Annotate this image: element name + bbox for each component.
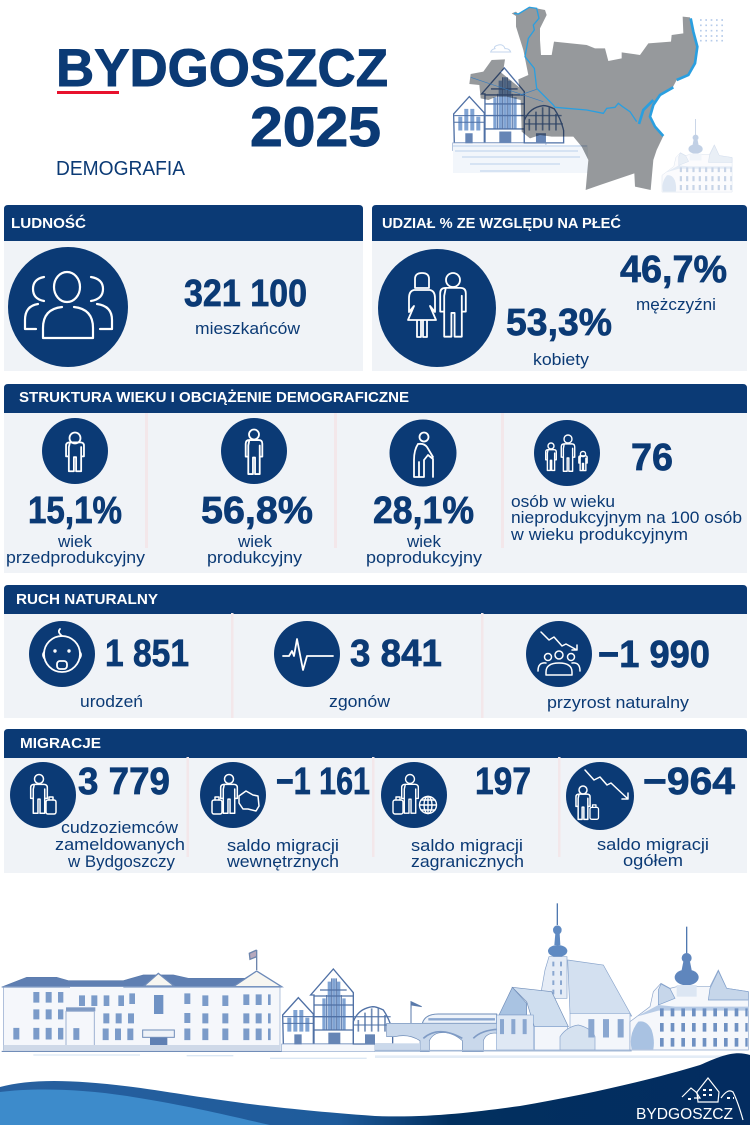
panel: age structure: 56,8% [201,490,313,532]
icon: baby [29,621,95,687]
panel: age structure: wiek [57,532,92,551]
icon: child [42,418,108,484]
panel: age structure: przedprodukcyjny [6,548,146,567]
panel: migration: wewnętrznych [226,852,339,871]
panel: migration: zagranicznych [411,852,524,871]
icon: migrant and globe [381,762,447,828]
title [56,39,388,180]
panel: age structure: wiek [237,532,272,551]
map of Bydgoszcz [469,7,723,190]
panel: migration: zameldowanych [55,835,185,854]
icon: migrant and falling arrow [566,762,634,830]
panel: age structure: produkcyjny [207,548,303,567]
panel: age structure: STRUKTURA WIEKU I OBCIĄŻENIE DEMOGRAFICZNE [19,389,409,406]
building: half-timbered granaries [282,969,393,1052]
panel: age structure: wiek [406,532,441,551]
panel: natural change: zgonów [329,692,391,711]
panel: age structure: osób w wieku [511,492,615,511]
icon: senior [390,420,456,486]
panel: natural change: 1 851 [105,633,189,675]
icon: migrant and Poland map [200,762,266,828]
panel: natural change: przyrost naturalny [547,693,690,712]
panel: gender: 46,7% [620,249,727,291]
panel: migration: −964 [643,761,735,803]
title: 2025 [250,95,381,158]
bridge and train [375,1002,498,1052]
icon: woman and man [378,249,496,367]
illustration: city skyline [2,950,393,1058]
logo: Bydgoszcz: BYDGOSZCZ [636,1106,733,1123]
dot grid [700,20,723,41]
panel: gender: UDZIAŁ % ZE WZGLĘDU NA PŁEĆ [382,214,621,232]
icon: people [8,247,128,367]
panel: gender [372,205,747,371]
panel: gender: 53,3% [506,302,612,344]
panel: migration: saldo migracji [597,835,709,854]
icon: heartbeat [274,621,340,687]
logo: Bydgoszcz [636,1078,743,1123]
palace illustration [662,119,732,192]
panel: natural change: −1 990 [598,634,710,676]
panel: natural change [4,585,747,718]
panel: migration [4,729,747,873]
panel: migration: −1 161 [276,761,370,803]
panel: migration: saldo migracji [227,836,339,855]
panel: migration: cudzoziemców [61,818,179,837]
panel: population: 321 100 [184,273,307,315]
icon: adult [221,418,287,484]
panel: population: mieszkańców [195,319,301,338]
panel: migration: MIGRACJE [20,735,101,752]
panel: population [4,205,363,371]
panel: gender: kobiety [533,350,590,369]
panel: migration: 3 779 [78,761,170,803]
icon: migrant with suitcase [10,762,76,828]
panel: migration: w Bydgoszczy [67,852,175,871]
panel: age structure: 76 [631,437,673,479]
building: main palace [2,950,283,1051]
panel: migration: 197 [475,761,531,803]
cloud [491,45,511,52]
title: DEMOGRAFIA [56,158,186,180]
icon: three generations [534,420,600,486]
panel: age structure: 28,1% [373,490,474,532]
panel: population: LUDNOŚĆ [11,214,86,232]
panel: age structure [4,384,747,573]
title: BYDGOSZCZ [56,39,388,98]
panel: natural change: 3 841 [350,633,442,675]
building: palace [630,927,748,1050]
panel: age structure: w wieku produkcyjnym [510,525,688,544]
panel: age structure: 15,1% [28,490,122,532]
panel: natural change: urodzeń [80,692,143,711]
decorative map background: houses [453,68,588,173]
panel: migration: saldo migracji [411,836,523,855]
icon: declining population [526,621,592,687]
panel: age structure: poprodukcyjny [366,548,483,567]
church [375,903,728,1057]
bottom wave [0,1053,750,1125]
panel: age structure: nieprodukcyjnym na 100 osób [511,508,742,527]
panel: migration: ogółem [623,851,683,870]
panel: gender: mężczyźni [636,295,716,314]
panel: natural change: RUCH NATURALNY [16,591,158,608]
